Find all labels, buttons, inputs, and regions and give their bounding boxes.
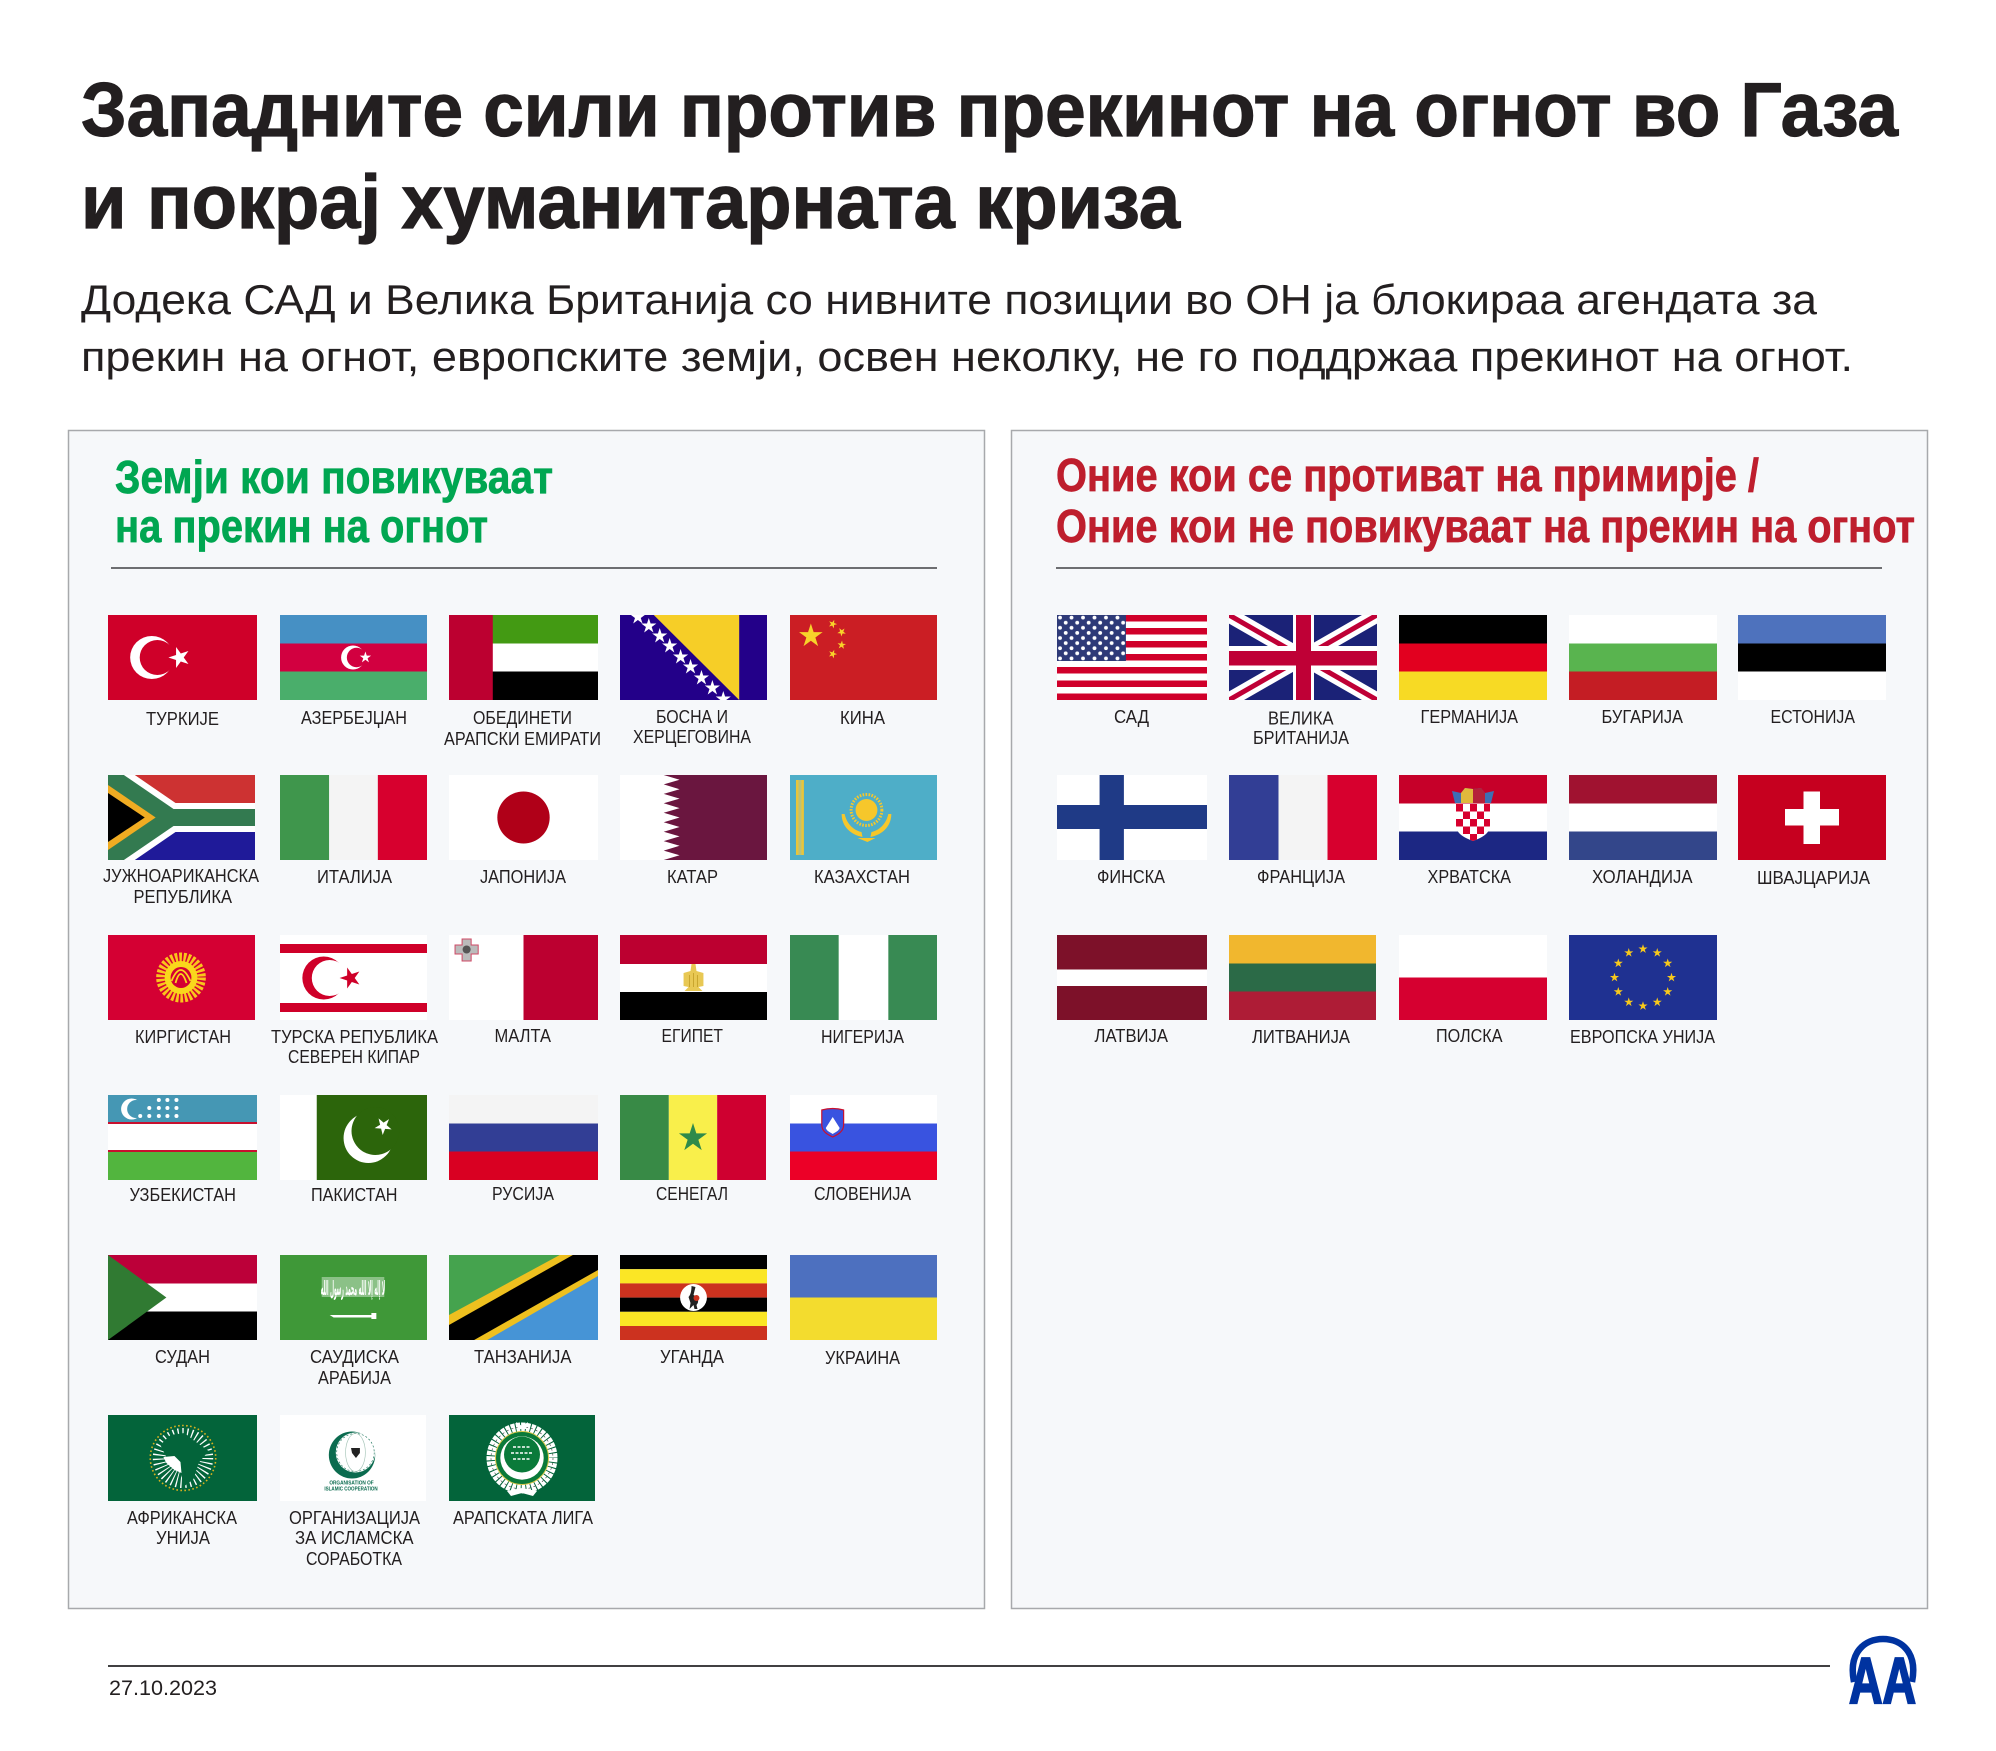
flag item: USA: САД (1114, 707, 1149, 727)
flag item: Croatia: ХРВАТСКА (1428, 867, 1511, 887)
flag item: Nigeria: НИГЕРИЈА (821, 1027, 904, 1047)
flag item: Latvia: ЛАТВИЈА (1094, 1026, 1168, 1046)
flag item: Bosnia: БОСНА И (656, 707, 728, 727)
title (81, 68, 1899, 245)
footer date: 27.10.2023 (109, 1677, 217, 1700)
flag item: Kazakhstan: КАЗАХСТАН (814, 867, 910, 887)
flag item: United Kingdom (1229, 615, 1377, 748)
flag item: Poland (1399, 935, 1547, 1046)
flag item: Slovenia (790, 1095, 937, 1204)
flag item: Estonia: ЕСТОНИЈА (1770, 707, 1855, 727)
flag item: Japan: ЈАПОНИЈА (480, 867, 566, 887)
flag item: Qatar: КАТАР (667, 867, 718, 887)
flag item: UAE: АРАПСКИ ЕМИРАТИ (444, 729, 601, 749)
flag item: Netherlands (1569, 775, 1717, 887)
flag item: Switzerland (1738, 775, 1886, 888)
flag item: Russia: РУСИЈА (492, 1184, 554, 1204)
flag item: Uganda: УГАНДА (660, 1347, 724, 1367)
flag item: Bosnia: ХЕРЦЕГОВИНА (633, 727, 751, 747)
flag item: Turkey (108, 615, 257, 729)
panel background (1012, 430, 1928, 1608)
panel heading: red: Оние кои се противат на примирје / (1056, 449, 1759, 501)
subtitle (81, 276, 1853, 380)
flag item: South Africa: ЈУЖНОАРИКАНСКА (103, 866, 259, 886)
flag item: Switzerland: ШВАЈЦАРИЈА (1757, 868, 1870, 888)
flag item: Senegal (620, 1095, 766, 1204)
flag item: Germany (1399, 615, 1547, 727)
flag item: Egypt: ЕГИПЕТ (662, 1026, 723, 1046)
footer rule (108, 1665, 1830, 1667)
flag item: Qatar (620, 775, 767, 887)
panel: countries opposing a ceasefire (1012, 430, 1928, 1608)
flag item: Latvia (1057, 935, 1207, 1046)
flag item: Tanzania (449, 1255, 598, 1367)
flag item: Netherlands: ХОЛАНДИЈА (1592, 867, 1692, 887)
flag item: Malta (449, 935, 598, 1046)
flag item: Sudan: СУДАН (155, 1347, 210, 1367)
flag item: France (1229, 775, 1377, 887)
flag item: United Kingdom: ВЕЛИКА (1268, 708, 1334, 728)
flag item: China (790, 615, 937, 728)
flag item: South Africa (103, 775, 259, 907)
flag item: Kazakhstan (790, 775, 937, 887)
flag item: Ukraine (790, 1255, 937, 1368)
title: и покрај хуманитарната криза (81, 160, 1181, 245)
flag item: Kyrgyzstan: КИРГИСТАН (135, 1027, 231, 1047)
flag item: United Kingdom: БРИТАНИЈА (1253, 728, 1349, 748)
flag item: African Union: УНИЈА (156, 1528, 210, 1548)
flag item: Organisation of Islamic Cooperation (280, 1415, 426, 1569)
flag item: Arab League: АРАПСКАТА ЛИГА (453, 1508, 593, 1528)
flag item: Poland: ПОЛСКА (1436, 1026, 1502, 1046)
flag item: Azerbaijan: АЗЕРБЕЈЏАН (301, 708, 407, 728)
panel heading: green: на прекин на огнот (115, 500, 488, 552)
flag item: Senegal: СЕНЕГАЛ (656, 1184, 728, 1204)
flag item: Nigeria (790, 935, 937, 1047)
flag item: Finland (1057, 775, 1207, 887)
flag item: Saudi Arabia (280, 1255, 427, 1388)
flag item: Arab League (449, 1415, 595, 1528)
panel: countries calling for a ceasefire (68, 430, 984, 1608)
flag item: European Union: ЕВРОПСКА УНИЈА (1570, 1027, 1715, 1047)
subtitle: Додека САД и Велика Британија со нивните позиции во ОН ја блокираа агендата за (81, 276, 1818, 323)
flag item: Organisation of Islamic Cooperation: ORGANISATION OF (329, 1480, 374, 1487)
flag item: Bulgaria: БУГАРИЈА (1602, 707, 1683, 727)
flag item: Slovenia: СЛОВЕНИЈА (814, 1184, 911, 1204)
flag item: Azerbaijan (280, 615, 427, 728)
flag item: Northern Cyprus (271, 935, 438, 1067)
flag item: Northern Cyprus: ТУРСКА РЕПУБЛИКА (271, 1027, 438, 1047)
flag item: Germany: ГЕРМАНИЈА (1420, 707, 1518, 727)
flag item: Pakistan (280, 1095, 427, 1205)
flag item: Uzbekistan (108, 1095, 257, 1205)
flag item: Italy: ИТАЛИЈА (317, 867, 392, 887)
title: Западните сили против прекинот на огнот во Газа (81, 68, 1899, 153)
flag item: Organisation of Islamic Cooperation: ЗА ИСЛАМСКА (295, 1528, 414, 1548)
flag item: Croatia (1399, 775, 1547, 887)
flag item: UAE: ОБЕДИНЕТИ (473, 708, 572, 728)
flag item: Kyrgyzstan (108, 935, 255, 1047)
flag item: European Union (1569, 935, 1717, 1047)
flag item: Japan (449, 775, 598, 887)
panel heading: green: Земји кои повикуваат (115, 451, 553, 503)
panel background (68, 430, 984, 1608)
flag item: Turkey: ТУРКИЈЕ (146, 709, 219, 729)
flag item: UAE (444, 615, 601, 749)
flag item: Northern Cyprus: СЕВЕРЕН КИПАР (288, 1047, 420, 1067)
flag item: Ukraine: УКРАИНА (825, 1348, 900, 1368)
flag item: South Africa: РЕПУБЛИКА (134, 887, 232, 907)
flag item: Organisation of Islamic Cooperation: ОРГАНИЗАЦИЈА (289, 1508, 420, 1528)
flag item: USA (1057, 615, 1207, 727)
flag item: Lithuania (1229, 935, 1376, 1047)
flag item: Lithuania: ЛИТВАНИЈА (1252, 1027, 1350, 1047)
flag item: Tanzania: ТАНЗАНИЈА (474, 1347, 572, 1367)
flag item: Estonia (1738, 615, 1886, 727)
flag item: Uganda (620, 1255, 767, 1367)
flag item: Saudi Arabia: САУДИСКА (310, 1347, 399, 1367)
subtitle: прекин на огнот, европските земји, освен неколку, не го поддржаа прекинот на огнот. (81, 333, 1853, 380)
flag item: Italy (280, 775, 427, 887)
flag item: Russia (449, 1095, 598, 1204)
flag item: Bosnia (620, 609, 767, 747)
flag item: Malta: МАЛТА (494, 1026, 551, 1046)
flag item: China: КИНА (840, 708, 885, 728)
flag item: Saudi Arabia: АРАБИЈА (318, 1368, 391, 1388)
flag item: Sudan (108, 1255, 257, 1367)
flag item: Bulgaria (1569, 615, 1717, 727)
flag item: Egypt (620, 935, 767, 1046)
panel heading: red (1056, 449, 1915, 552)
flag item: France: ФРАНЦИЈА (1257, 867, 1345, 887)
flag item: Organisation of Islamic Cooperation: СОРАБОТКА (306, 1549, 402, 1569)
flag item: African Union (108, 1415, 257, 1548)
icon: Anadolu Agency logo (1849, 1639, 1916, 1717)
flag item: Uzbekistan: УЗБЕКИСТАН (130, 1185, 236, 1205)
panel heading: green (115, 451, 553, 552)
flag item: Pakistan: ПАКИСТАН (311, 1185, 398, 1205)
flag item: African Union: АФРИКАНСКА (127, 1508, 237, 1528)
flag item: Finland: ФИНСКА (1097, 867, 1165, 887)
flag item: Organisation of Islamic Cooperation: ISLAMIC COOPERATION (324, 1486, 378, 1493)
icon: Anadolu Agency logo: AA (1849, 1644, 1916, 1717)
